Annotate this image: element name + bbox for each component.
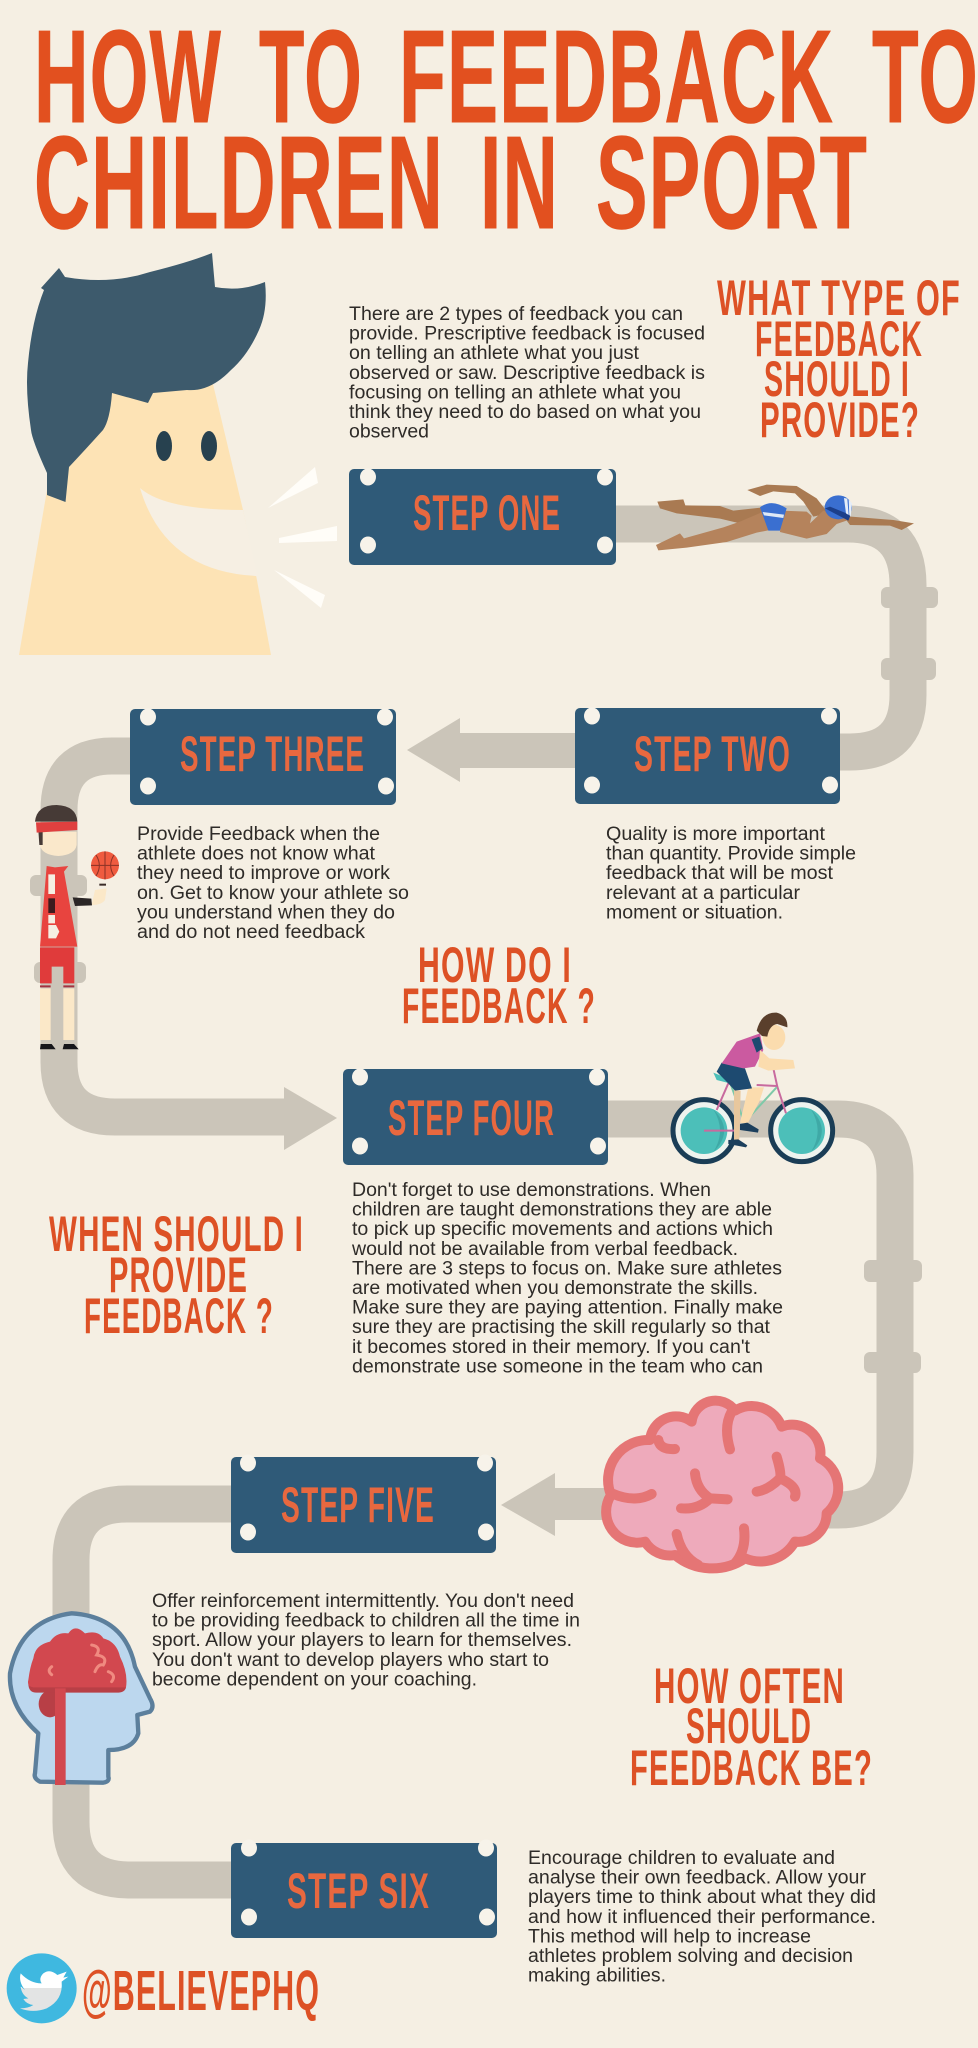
text: self evaluation: Encourage children to evaluate and <box>528 1848 835 1869</box>
icon: head with brain <box>10 1613 152 1785</box>
title: HOW <box>34 3 222 150</box>
step one plate: STEP ONE <box>413 485 561 541</box>
text: types of feedback: observed or saw. Descriptive feedback is <box>349 363 705 384</box>
text: quality over quantity: moment or situation. <box>606 902 783 923</box>
arm and head <box>758 1050 795 1071</box>
icon: twitter bird <box>7 1953 77 2023</box>
text: types of feedback <box>349 304 705 443</box>
pipe: step three to step four with arrow <box>30 756 337 1150</box>
icon: coach head shouting <box>19 253 337 655</box>
text: use demonstrations <box>351 1180 783 1377</box>
step four plate <box>343 1068 608 1165</box>
title: CHILDREN <box>34 109 444 256</box>
step six plate <box>231 1840 497 1938</box>
text: self evaluation <box>528 1848 876 1987</box>
heading: how often should feedback be <box>630 1658 873 1796</box>
heading: how often should feedback be: HOW OFTEN <box>654 1658 845 1714</box>
forward arm <box>843 516 914 530</box>
text: types of feedback: observed <box>349 422 429 443</box>
text: reinforcement: become dependent on your coaching. <box>152 1669 477 1690</box>
trunks <box>760 503 787 531</box>
arrow: brain to step five <box>501 1473 620 1536</box>
pipe: step five to step six <box>71 1504 235 1880</box>
step two plate: STEP TWO <box>634 726 791 782</box>
shoes <box>728 1123 759 1147</box>
icon: pink brain <box>606 1401 838 1568</box>
text: types of feedback: focusing on telling an athlete what you <box>349 382 681 403</box>
text: when to provide feedback: athlete does not know what <box>137 844 376 865</box>
text: use demonstrations: demonstrate use someone in the team who can <box>352 1356 763 1377</box>
text: types of feedback: on telling an athlete what you just <box>349 343 640 364</box>
text: reinforcement: Offer reinforcement intermittently. You don't need <box>152 1591 574 1612</box>
text: types of feedback: think they need to do based on what you <box>349 402 701 423</box>
step five plate <box>231 1454 496 1553</box>
text: quality over quantity: relevant at a particular <box>606 883 801 904</box>
eyes <box>156 431 172 461</box>
title: TO <box>259 3 363 150</box>
title: IN <box>480 109 559 256</box>
heading: when should I provide feedback <box>49 1206 304 1344</box>
text: use demonstrations: are motivated when you demonstrate the skills. <box>352 1278 758 1299</box>
raised arm <box>747 485 828 517</box>
text: when to provide feedback: and do not need feedback <box>137 922 366 943</box>
text: reinforcement: You don't want to develop players who start to <box>152 1650 549 1671</box>
text: use demonstrations: to pick up specific movements and actions which <box>352 1219 773 1240</box>
text: self evaluation: making abilities. <box>528 1966 666 1987</box>
upper leg <box>657 499 767 523</box>
text: when to provide feedback: on. Get to know your athlete so <box>137 883 409 904</box>
text: types of feedback: provide. Prescriptive feedback is focused <box>349 324 705 345</box>
heading: how do I feedback: FEEDBACK ? <box>402 978 596 1034</box>
sound lines <box>268 467 337 608</box>
cap <box>825 495 852 519</box>
text: self evaluation: This method will help to increase <box>528 1926 811 1947</box>
text: self evaluation: athletes problem solving and decision <box>528 1946 853 1967</box>
text: self evaluation: and how it influenced their performance. <box>528 1907 876 1928</box>
legs <box>734 1090 741 1140</box>
icon: swimmer <box>656 485 914 550</box>
text: use demonstrations: would not be available from verbal feedback. <box>351 1239 738 1260</box>
text: self evaluation: players time to think about what they did <box>528 1887 876 1908</box>
pipe: step one to step two <box>616 524 938 752</box>
text: use demonstrations: it becomes stored in their memory. If you can't <box>352 1337 751 1358</box>
text: quality over quantity: than quantity. Provide simple <box>606 844 856 865</box>
text: use demonstrations: children are taught demonstrations they are able <box>352 1200 772 1221</box>
text: use demonstrations: Make sure they are paying attention. Finally make <box>352 1298 783 1319</box>
twitter handle: @BELIEVEPHQ <box>82 1959 320 2023</box>
text: when to provide feedback: they need to improve or work <box>137 863 391 884</box>
step five plate: STEP FIVE <box>281 1477 435 1533</box>
text: use demonstrations: sure they are practising the skill regularly so that <box>352 1317 771 1338</box>
text: self evaluation: analyse their own feedback. Allow your <box>528 1868 867 1889</box>
heading: what type of feedback <box>717 270 961 448</box>
lower leg <box>656 512 770 550</box>
text: when to provide feedback <box>137 824 409 943</box>
heading: when should I provide feedback: WHEN SHOULD I <box>49 1206 304 1262</box>
text: reinforcement: sport. Allow your players to learn for themselves. <box>152 1630 572 1651</box>
step six plate: STEP SIX <box>287 1863 430 1919</box>
text: reinforcement <box>152 1591 580 1690</box>
torso <box>780 511 848 539</box>
step two plate <box>575 708 840 804</box>
text: use demonstrations: Don't forget to use demonstrations. When <box>352 1180 711 1201</box>
hair <box>27 253 266 502</box>
heading: when should I provide feedback: FEEDBACK ? <box>84 1288 274 1344</box>
text: quality over quantity <box>606 824 856 923</box>
wheels <box>673 1100 735 1162</box>
arrow: step two to step three <box>407 718 575 782</box>
frame <box>704 1068 786 1131</box>
heading: how often should feedback be: SHOULD <box>686 1698 812 1754</box>
icon: basketball player <box>35 805 119 1049</box>
step three plate: STEP THREE <box>180 726 365 782</box>
pipe: step four to brain <box>605 1119 922 1510</box>
heading: when should I provide feedback: PROVIDE <box>109 1247 248 1303</box>
step one plate <box>349 468 616 565</box>
heading: how do I feedback <box>402 937 596 1034</box>
text: when to provide feedback: you understand when they do <box>137 902 395 923</box>
text: reinforcement: to be providing feedback to children all the time in <box>152 1611 580 1632</box>
text: use demonstrations: There are 3 steps to focus on. Make sure athletes <box>352 1258 782 1279</box>
step four plate: STEP FOUR <box>388 1090 555 1146</box>
torso <box>722 1033 763 1068</box>
face and neck <box>19 380 271 655</box>
text: types of feedback: There are 2 types of feedback you can <box>349 304 683 325</box>
text: quality over quantity: Quality is more important <box>606 824 826 845</box>
saddle and shorts <box>713 1073 732 1083</box>
text: quality over quantity: feedback that will be most <box>606 863 834 884</box>
icon: cyclist <box>673 1013 833 1162</box>
step three plate <box>130 708 396 805</box>
title <box>34 3 978 256</box>
open mouth <box>140 488 257 576</box>
text: when to provide feedback: Provide Feedback when the <box>137 824 380 845</box>
heading: how do I feedback: HOW DO I <box>418 937 572 993</box>
